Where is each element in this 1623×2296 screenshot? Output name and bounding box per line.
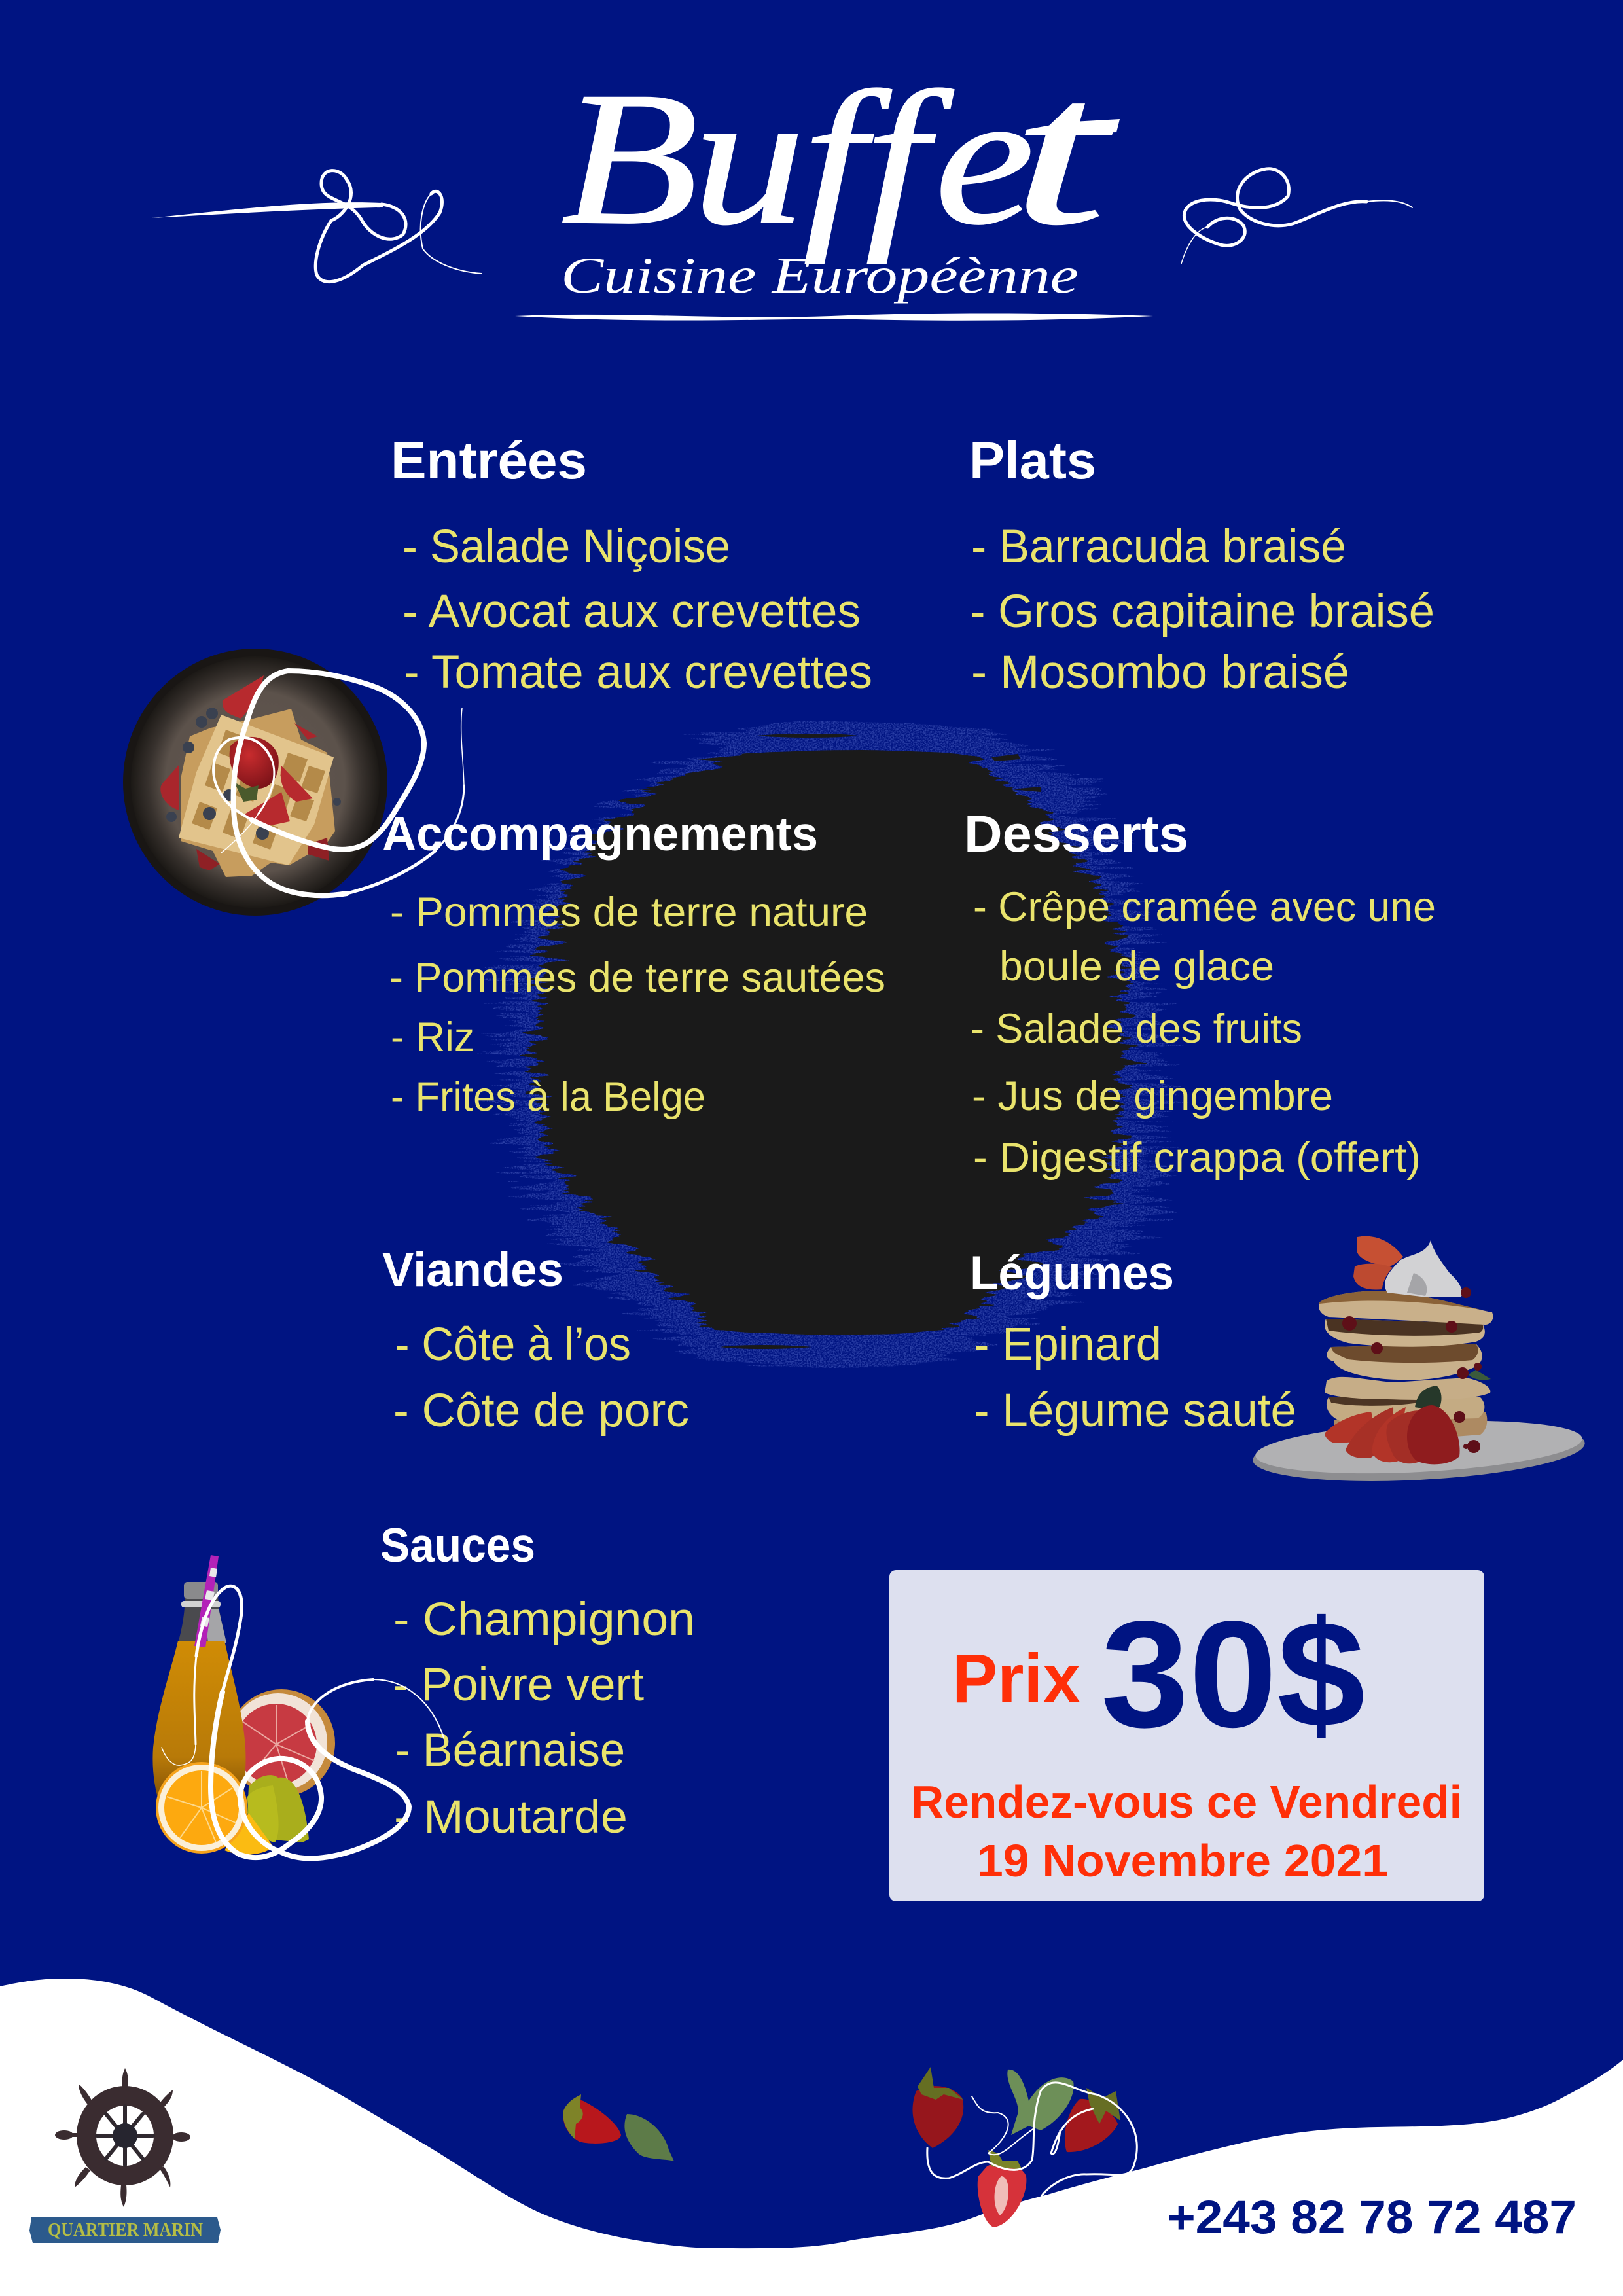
section: Desserts [964,804,1436,1181]
list: Accompagnements items: - Pommes de terre sautées [389,955,885,1001]
list: Sauces items: - Moutarde [394,1791,628,1843]
decoration: strawberries and mint cluster [912,2067,1137,2227]
logo: Quartier Marin [29,2068,221,2243]
list: Sauces items: - Poivre vert [393,1659,644,1711]
heading: Viandes: Viandes [382,1244,563,1297]
waffle back [181,709,335,877]
list: Plats items: - Gros capitaine braisé [970,586,1435,637]
scribble over waffle plate [213,671,464,895]
list: Viandes items: - Côte à l’os [395,1319,631,1371]
pancake layer 1 [1319,1291,1493,1325]
list: Sauces items: - Béarnaise [395,1725,625,1776]
top strawberry [1357,1236,1403,1266]
right flourish [1181,169,1412,264]
heading: Entrées: Entrées [391,431,587,490]
title: Buffet: e [935,52,1035,264]
grapefruit [228,1689,335,1797]
strawberry slices [223,675,264,719]
brush stroke dark circle [504,721,1158,1368]
title: Buffet: u [692,52,805,264]
list: Sauces items: - Champignon [393,1594,695,1645]
list: Sauces items [393,1594,695,1843]
heading: Desserts: Desserts [964,804,1188,863]
strawberry 2 [1065,2099,1118,2152]
scribble over juice bottle [162,1586,444,1858]
section: Sauces [380,1519,695,1843]
list: Desserts items: - Crêpe cramée avec une [973,884,1436,930]
list: Légumes items [974,1319,1296,1437]
left flourish [152,171,482,282]
straw [194,1555,219,1647]
list: Accompagnements items: - Frites à la Belge [391,1074,705,1120]
title: Buffet: B [561,52,698,264]
list: Entrées items: - Salade Niçoise [402,521,730,573]
photo: waffle plate [123,649,387,916]
decoration: strawberry and mint leaf [563,2094,674,2161]
list: Entrées items: - Avocat aux crevettes [402,586,861,637]
blueberries [166,708,341,840]
center strawberry [230,737,279,789]
list: Desserts items: boule de glace [999,944,1274,990]
section: Plats [969,431,1435,698]
star fruit [247,1775,309,1842]
title: Buffet: f [803,52,895,264]
list: Viandes items: - Côte de porc [393,1385,689,1437]
list: Légumes items: - Légume sauté [974,1385,1296,1437]
pancake layer 2 [1325,1319,1485,1347]
pancake layer 5 [1327,1397,1484,1422]
waffle front [179,715,334,865]
pancake layer 3 [1327,1344,1482,1380]
heading: Sauces: Sauces [380,1519,535,1572]
section: Viandes [382,1244,689,1437]
price: 30$: 30$ [1101,1590,1365,1759]
plate [1251,1415,1586,1488]
orange wedge [224,1813,274,1855]
list: Légumes items: - Epinard [974,1319,1162,1371]
list: Plats items: - Mosombo braisé [971,647,1349,698]
pomegranate seeds [1342,1287,1482,1453]
date line 1: Rendez-vous ce Vendredi [911,1776,1462,1827]
list: Accompagnements items: - Pommes de terre nature [390,889,868,935]
heading: Accompagnements: Accompagnements [382,808,818,861]
heading: Plats: Plats [969,431,1096,490]
label: Prix: Prix [952,1640,1080,1717]
title: Buffet [561,36,1120,268]
section: Entrées [391,431,872,698]
price box [889,1570,1484,1901]
list: Accompagnements items: - Riz [391,1014,474,1060]
list: Viandes items [393,1319,689,1437]
list: Plats items [970,521,1435,698]
list: Desserts items: - Jus de gingembre [972,1073,1333,1119]
icon: ship wheel [55,2068,190,2207]
whipped cream [1385,1240,1462,1297]
bottle glass [178,1584,226,1643]
scribble lines [927,2083,1137,2199]
white wave footer [0,1979,1623,2296]
logo text: QUARTIER MARIN [48,2220,203,2240]
section: Légumes [970,1247,1296,1437]
list: Entrées items: - Tomate aux crevettes [404,647,872,698]
orange slice [156,1762,247,1854]
photo: pancake stack [1251,1236,1586,1488]
mint leaf [1007,2070,1074,2135]
list: Desserts items [971,884,1436,1181]
mint leaves [1415,1386,1442,1408]
pancake layer 6 [1334,1412,1487,1437]
subtitle: Cuisine Européènne: Cuisine Européènne [561,247,1079,304]
list: Accompagnements items [389,889,885,1120]
heading: Légumes: Légumes [970,1247,1174,1300]
date line 2: 19 Novembre 2021 [977,1835,1388,1886]
photo: juice bottle and fruits [152,1555,335,1855]
strawberry 1 [912,2086,963,2148]
title: Buffet: t [1011,36,1118,268]
list: Desserts items: - Digestif crappa (offert) [973,1135,1421,1181]
phone number: +243 82 78 72 487 [1167,2192,1577,2244]
title underline [515,313,1153,321]
title: Buffet: f [865,52,957,264]
list: Plats items: - Barracuda braisé [971,521,1346,573]
section: Accompagnements [382,808,885,1120]
banner [29,2217,221,2243]
list: Entrées items [402,521,872,698]
list: Desserts items: - Salade des fruits [971,1006,1302,1052]
strawberry 3 cut [978,2163,1026,2227]
juice [152,1641,245,1806]
pancake layer 4 [1325,1377,1490,1400]
strawberry fan [1325,1412,1372,1443]
